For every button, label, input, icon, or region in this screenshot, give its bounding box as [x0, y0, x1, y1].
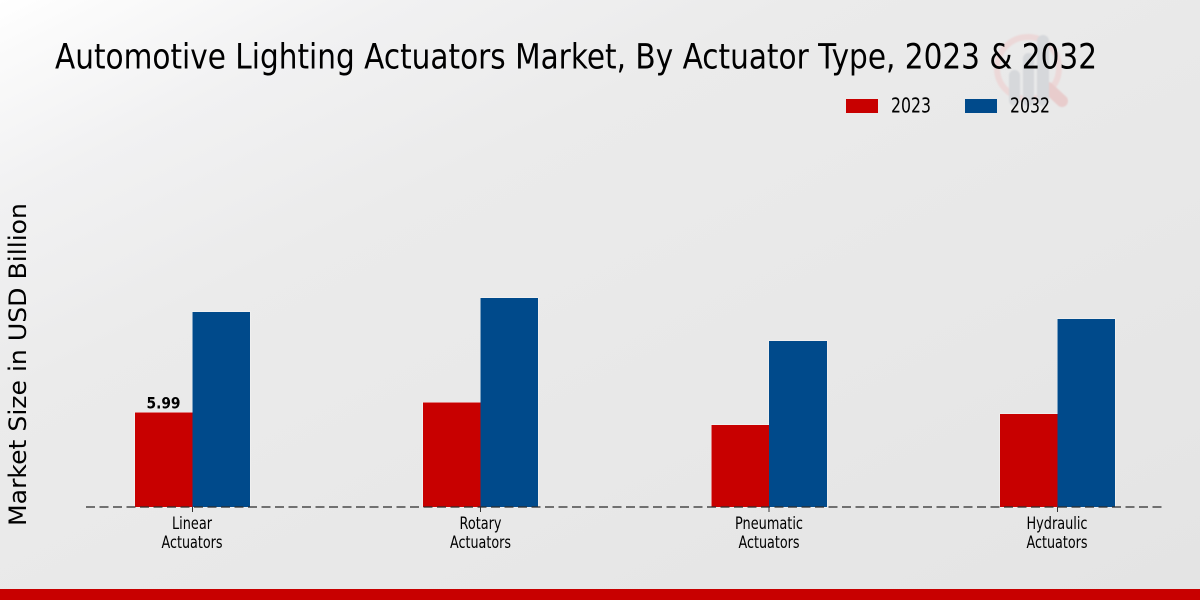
footer bar	[0, 589, 1200, 600]
y-axis label: Market Size in USD Billion	[4, 203, 32, 526]
category label: Rotary Actuators: Actuators	[450, 533, 511, 552]
category label: Pneumatic Actuators: Actuators	[738, 533, 800, 552]
icon: watermark logo	[997, 35, 1062, 106]
category label: Rotary Actuators: Rotary	[460, 514, 502, 533]
legend	[846, 94, 1050, 118]
category label: Hydraulic Actuators: Hydraulic	[1026, 514, 1088, 533]
category label: Linear Actuators: Actuators	[162, 533, 222, 552]
bar group: Hydraulic Actuators	[1000, 318, 1116, 508]
category label: Hydraulic Actuators	[1026, 514, 1088, 552]
category label: Pneumatic Actuators	[735, 514, 803, 552]
x-axis baseline	[86, 506, 1164, 508]
category label: Linear Actuators: Linear	[172, 514, 212, 533]
legend item: 2032: 2032	[1010, 94, 1050, 118]
bar group: Pneumatic Actuators	[711, 340, 828, 508]
category label: Hydraulic Actuators: Actuators	[1026, 533, 1088, 552]
category label: Linear Actuators	[162, 514, 222, 552]
category label: Rotary Actuators	[450, 514, 511, 552]
legend item: 2023	[846, 94, 931, 118]
legend item: 2023: 2023	[891, 94, 931, 118]
bar group: Rotary Actuators	[422, 298, 538, 508]
category label: Pneumatic Actuators: Pneumatic	[735, 514, 803, 533]
bar group: Linear Actuators	[134, 312, 250, 508]
legend item: 2032	[965, 94, 1050, 118]
bar chart	[86, 298, 1164, 512]
value label: 5.99: 5.99	[146, 394, 180, 412]
